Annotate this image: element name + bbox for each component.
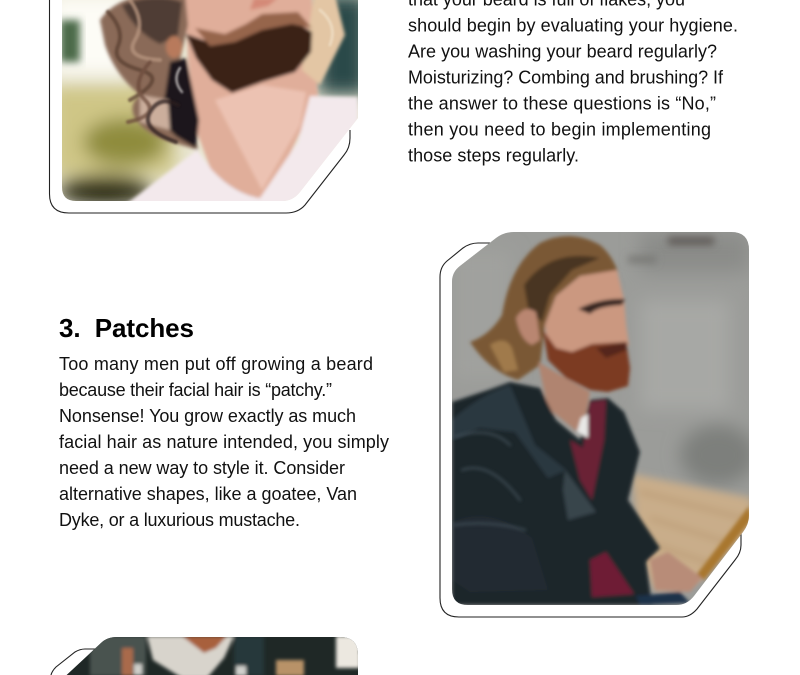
- heading: 3. Patches: 3. Patches: [59, 313, 194, 343]
- photo 1: bearded man with curly hair: [50, 0, 368, 213]
- curly hair strands: [108, 0, 332, 142]
- text block: patches paragraph: because their facial hair is “patchy.”: [59, 380, 332, 400]
- maroon shirt: [570, 400, 606, 500]
- ear: [166, 36, 182, 58]
- text block: hygiene paragraph: Moisturizing? Combing and brushing? If: [408, 68, 724, 88]
- text block: patches paragraph: alternative shapes, like a goatee, Van: [59, 484, 357, 504]
- face: [543, 268, 630, 354]
- neck: [538, 362, 590, 434]
- hand: [650, 552, 702, 592]
- skin: [185, 0, 318, 200]
- text block: hygiene paragraph: then you need to begin implementing: [408, 120, 711, 140]
- beard: [543, 330, 630, 392]
- text block: hygiene paragraph: Are you washing your beard regularly?: [408, 42, 717, 62]
- jacket: [452, 382, 660, 605]
- text block: patches paragraph: Nonsense! You grow exactly as much: [59, 406, 356, 426]
- text block: hygiene paragraph: should begin by evaluating your hygiene.: [408, 16, 738, 36]
- text block: hygiene paragraph: [408, 0, 738, 166]
- photo 3: partial photo with face mask: [51, 636, 360, 675]
- photo 2: man with red beard in leather jacket: [440, 230, 756, 617]
- text block: hygiene paragraph: those steps regularly.: [408, 146, 579, 166]
- text block: patches paragraph: Too many men put off growing a beard: [59, 354, 373, 374]
- text block: patches paragraph: Dyke, or a luxurious mustache.: [59, 510, 300, 530]
- hair: [470, 236, 618, 380]
- text block: patches paragraph: facial hair as nature intended, you simply: [59, 432, 389, 452]
- outline frame 2: [440, 243, 741, 617]
- text block: patches paragraph: need a new way to style it. Consider: [59, 458, 345, 478]
- outline frame 3: [51, 649, 97, 675]
- jacket highlights: [454, 432, 525, 530]
- text block: hygiene paragraph: the answer to these questions is “No,”: [408, 94, 716, 114]
- outline frame 1: [50, 0, 350, 213]
- text block: patches paragraph: [59, 354, 389, 530]
- bench: [632, 474, 752, 590]
- shirt: [125, 96, 358, 205]
- beard: [186, 20, 312, 93]
- hair mass: [100, 0, 198, 150]
